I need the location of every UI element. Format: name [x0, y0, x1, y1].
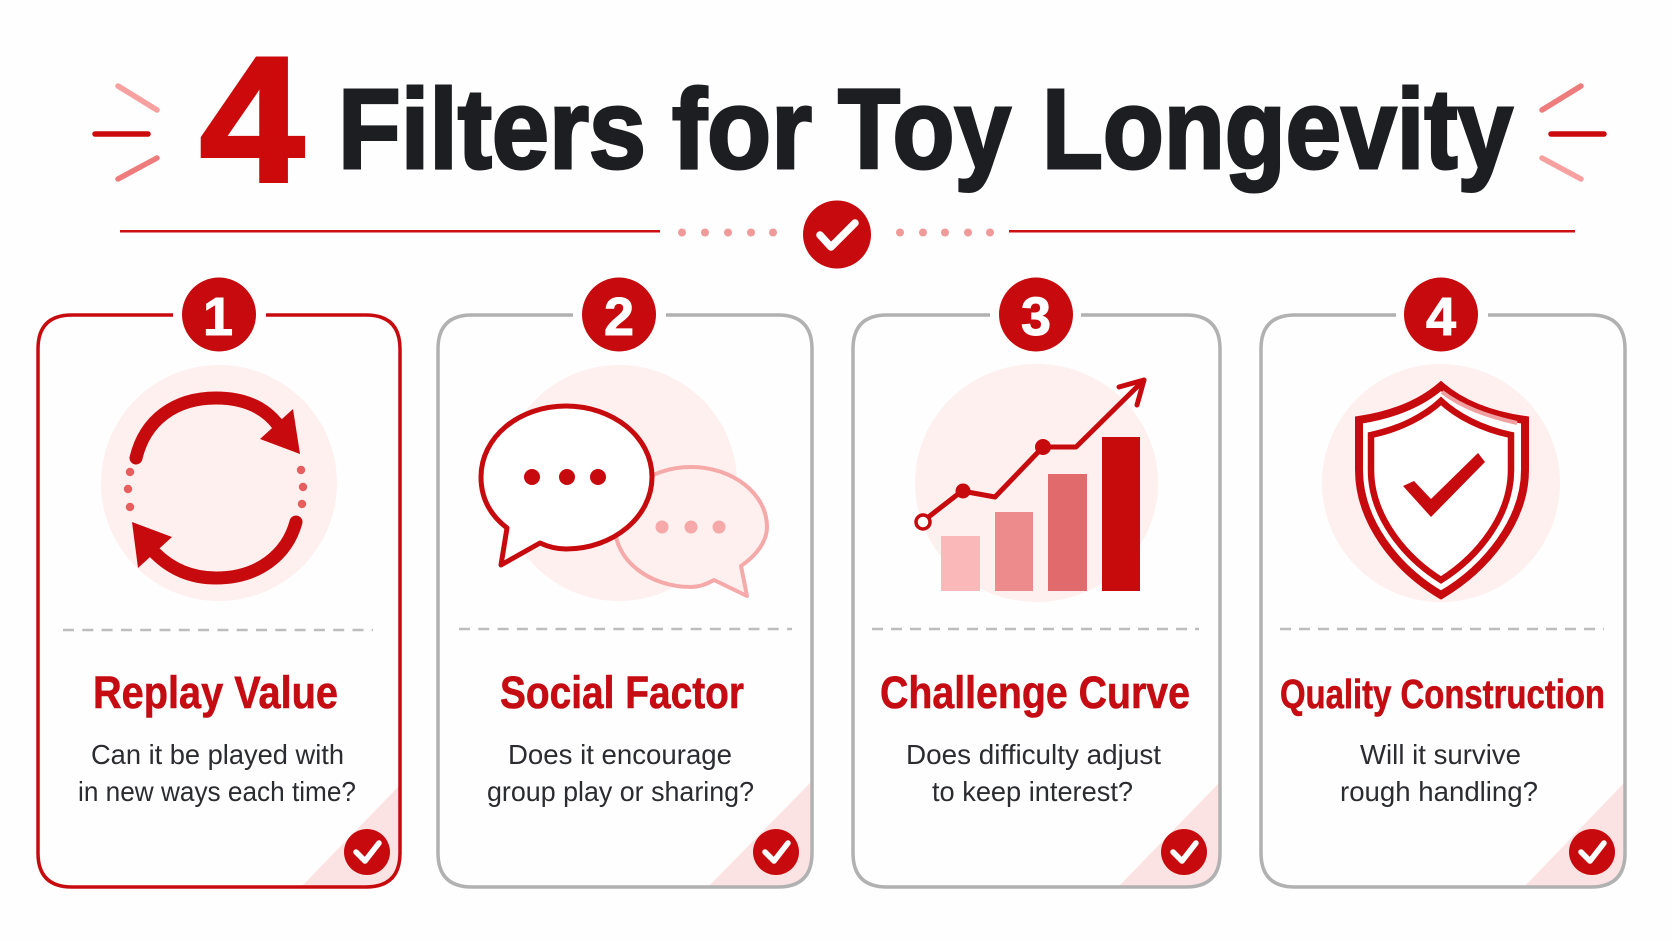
- bar chart: [941, 437, 1140, 591]
- divider with check: [120, 200, 1575, 268]
- card outline: [1261, 315, 1625, 887]
- description: [1340, 739, 1538, 807]
- card corner tint: [1524, 783, 1624, 887]
- heading: Challenge Curve: [880, 667, 1190, 718]
- description: Does it encourage: [508, 739, 732, 770]
- number badge 3: 3: [1021, 287, 1051, 347]
- description: to keep interest?: [932, 776, 1133, 807]
- description: Can it be played with: [91, 739, 344, 770]
- title text: for: [672, 66, 812, 192]
- heading: Social Factor: [500, 667, 744, 718]
- card corner tint: [301, 786, 399, 887]
- number badge 2: 2: [604, 287, 634, 347]
- heading: Replay Value: [93, 667, 338, 718]
- icon: corner check: [1161, 829, 1207, 875]
- icon: shield: [1322, 364, 1560, 602]
- description: in new ways each time?: [78, 776, 356, 807]
- card outline: [853, 315, 1220, 887]
- card outline: [38, 315, 400, 887]
- description: group play or sharing?: [487, 776, 754, 807]
- number badge 2: [582, 278, 656, 352]
- card corner tint: [1118, 783, 1219, 887]
- title: [200, 20, 1513, 219]
- title text: Longevity: [1042, 66, 1513, 192]
- icon: right accent rays: [1542, 86, 1604, 179]
- icon: corner check: [1569, 829, 1615, 875]
- description: [78, 739, 356, 807]
- panel: quality construction: [1261, 278, 1625, 887]
- front bubble: [481, 406, 652, 565]
- icon: center check badge: [803, 200, 871, 268]
- description: Does difficulty adjust: [906, 739, 1161, 770]
- description: [906, 739, 1161, 807]
- card outline: [438, 315, 812, 887]
- panel: replay value: [38, 278, 400, 887]
- icon: replay arrows: [101, 365, 337, 601]
- icon: left accent rays: [95, 86, 157, 179]
- icon: growth chart: [915, 364, 1158, 602]
- back bubble: [615, 467, 767, 596]
- panel: challenge curve: [853, 278, 1220, 887]
- trend arrow: [916, 380, 1144, 529]
- number badge 3: [999, 278, 1073, 352]
- number badge 4: [1404, 278, 1478, 352]
- number badge 4: 4: [1426, 287, 1456, 347]
- title text: Filters: [338, 66, 646, 192]
- panel: social factor: [438, 278, 812, 887]
- title numeral 4: 4: [200, 20, 304, 219]
- description: Will it survive: [1360, 739, 1521, 770]
- title text: Toy: [838, 66, 1011, 192]
- icon: speech bubbles: [481, 365, 767, 601]
- title text: [338, 66, 1513, 192]
- number badge 1: 1: [203, 287, 233, 347]
- description: [487, 739, 754, 807]
- icon: corner check: [344, 829, 390, 875]
- description: rough handling?: [1340, 776, 1538, 807]
- icon: corner check: [753, 829, 799, 875]
- number badge 1: [182, 278, 256, 352]
- card corner tint: [708, 782, 811, 887]
